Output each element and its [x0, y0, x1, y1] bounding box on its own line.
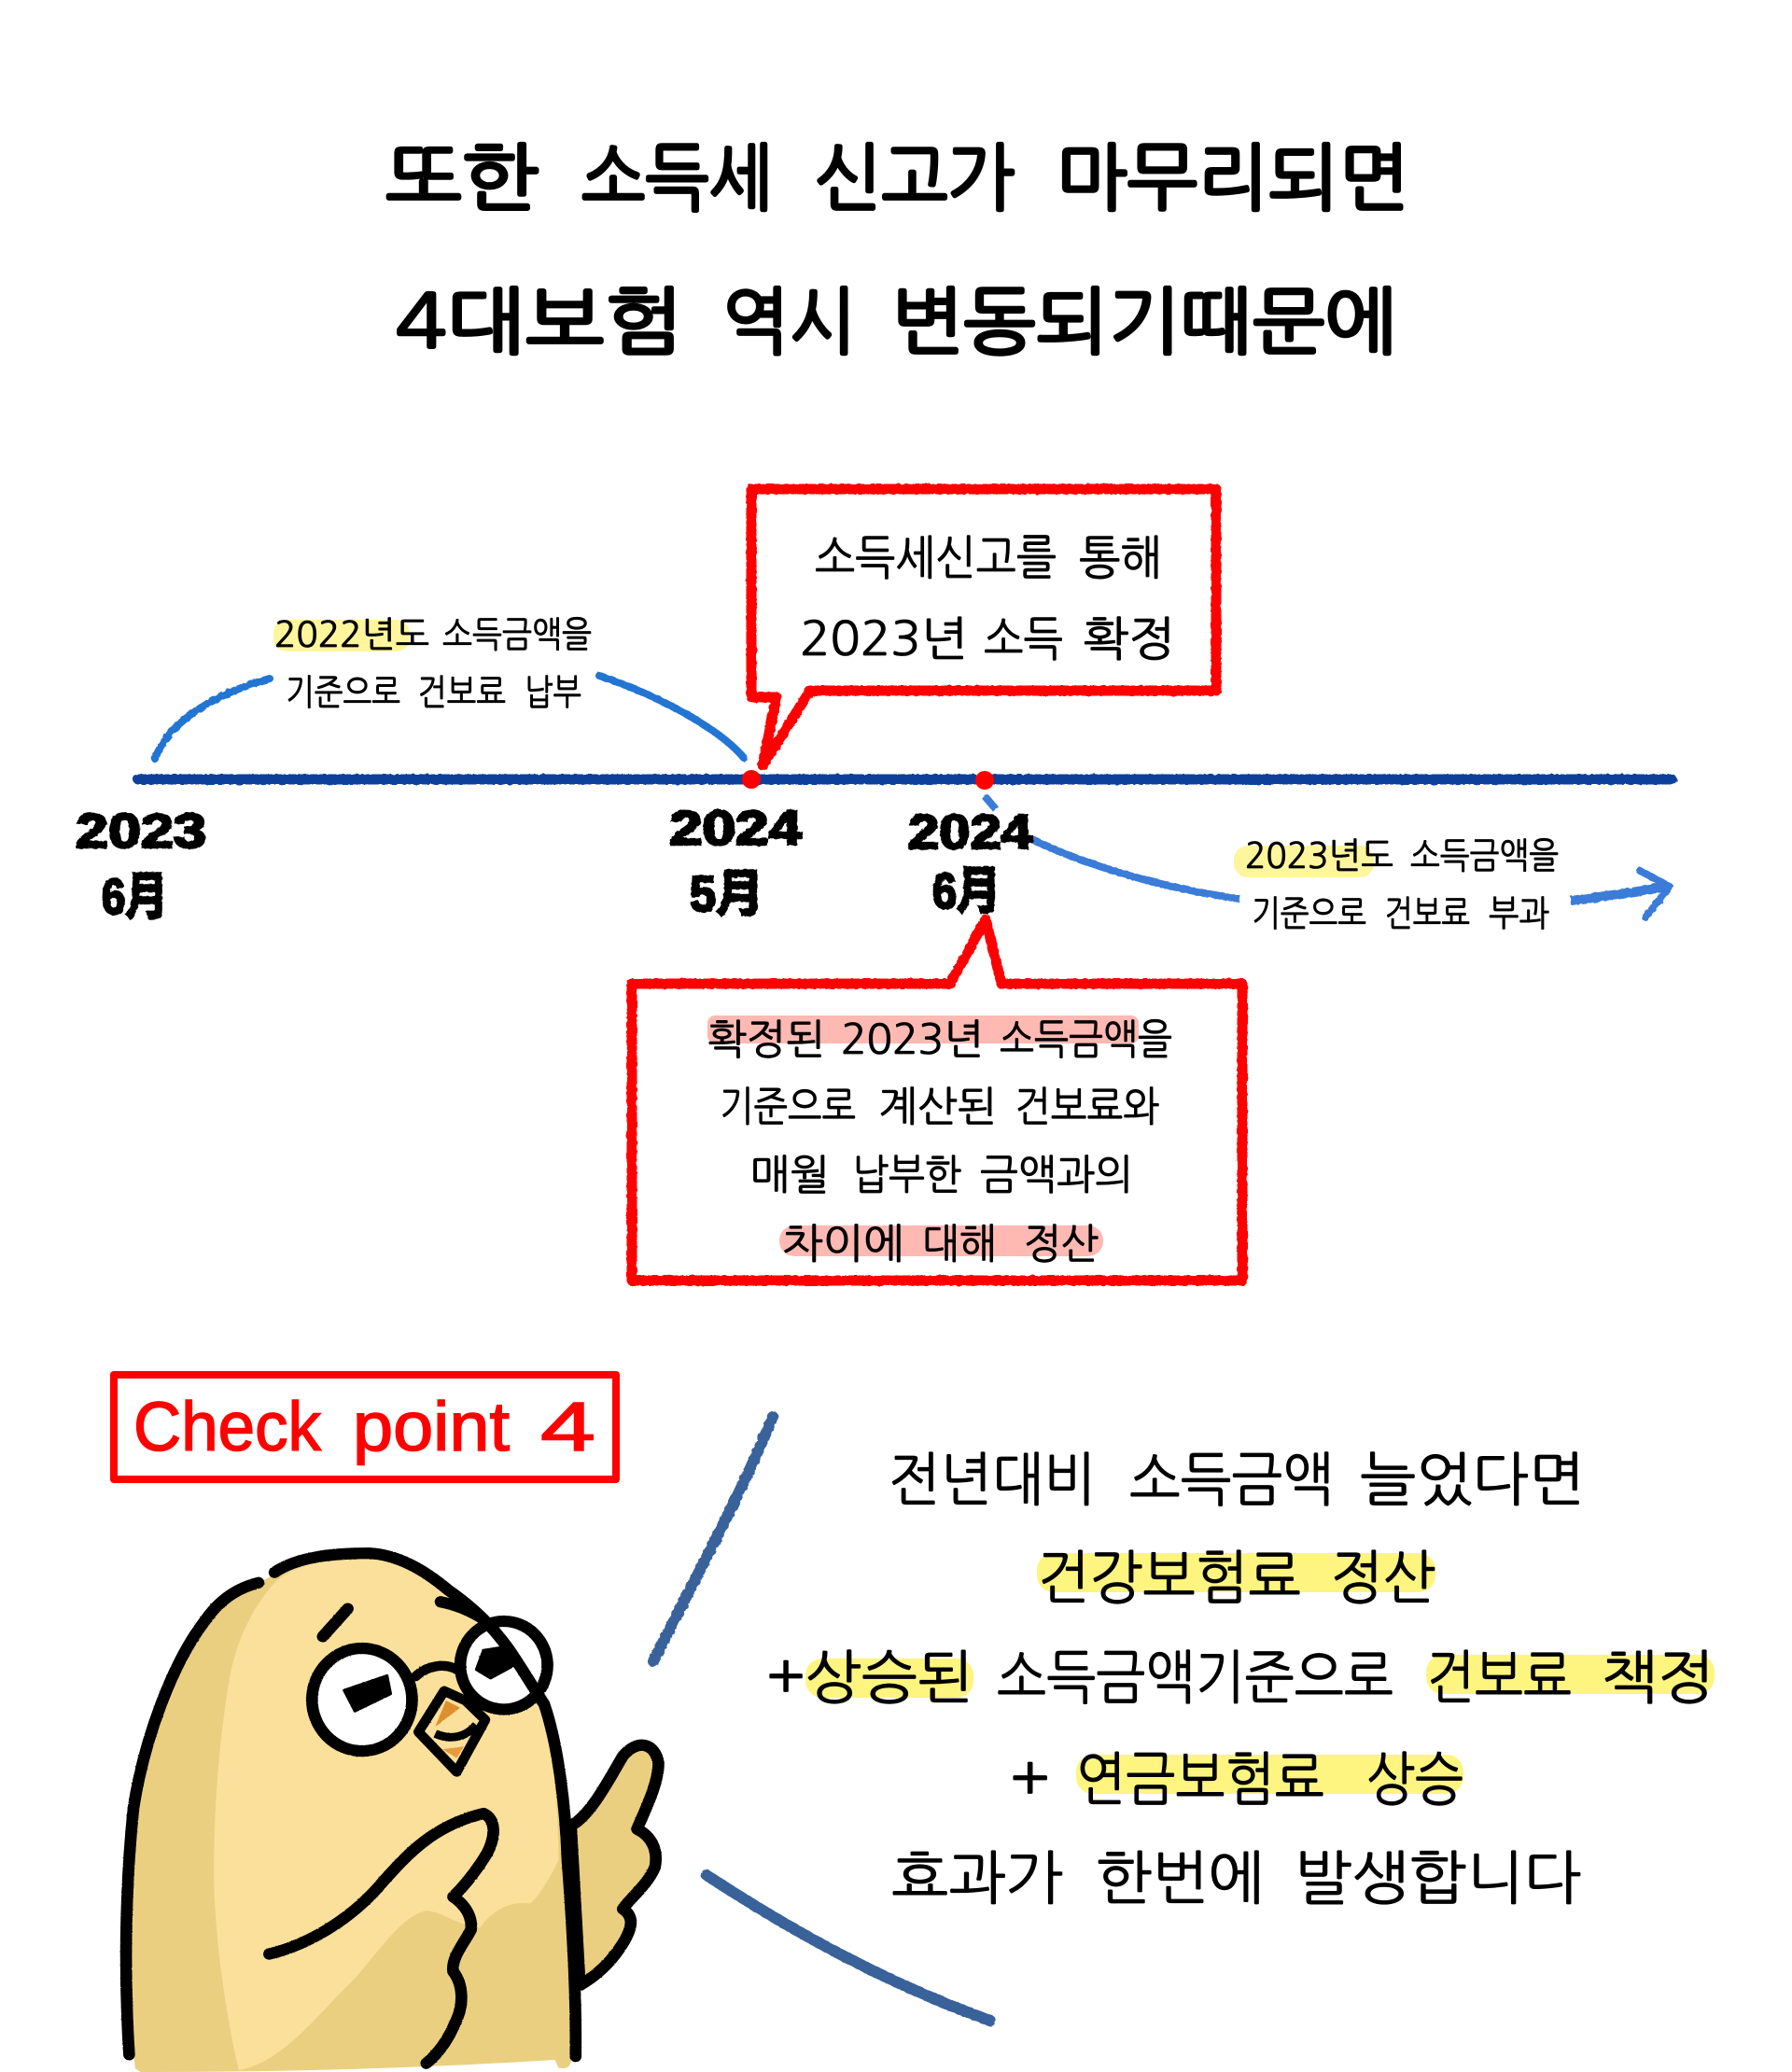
callout: settlement explanation: 금액과의 [980, 1155, 1133, 1196]
callout: income confirmed: 통해 [1079, 535, 1162, 581]
speech mark: lower stroke [707, 1875, 990, 2021]
date label: 2024 June [908, 805, 1032, 919]
explanation text: +상승된 [766, 1648, 973, 1706]
arc arrow: 2023 income basis period [985, 796, 1670, 917]
explanation text: 상승 [1366, 1750, 1463, 1808]
label: 2022 income basis: 건보료 [417, 675, 506, 710]
callout: settlement explanation [632, 919, 1242, 1281]
callout: settlement explanation: 대해 [922, 1224, 997, 1265]
explanation text [766, 1450, 1715, 1907]
badge: check point 4: Check [133, 1388, 322, 1465]
title: 또한 [385, 142, 539, 215]
duck outline [126, 1553, 576, 2056]
callout: settlement explanation: 2023년 [841, 1019, 984, 1060]
callout: settlement explanation: 건보료와 [1015, 1086, 1159, 1127]
explanation text: 소득금액 [1129, 1450, 1334, 1508]
badge: check point 4 [114, 1375, 616, 1479]
title: 신고가 [815, 142, 1015, 215]
marker: 2024 June [975, 771, 994, 790]
badge: check point 4: point [353, 1388, 510, 1465]
label: 2023 income basis: 기준으로 [1252, 896, 1366, 931]
callout: settlement explanation: 매월 [750, 1155, 830, 1196]
date label: 2023 June [76, 805, 206, 925]
badge: check point 4: 4 [540, 1388, 595, 1465]
date label: 2023 June: 6月 [102, 869, 168, 925]
callout: settlement explanation: 확정된 [707, 1019, 825, 1060]
callout: settlement explanation: 정산 [1024, 1224, 1099, 1265]
label: 2023 income basis: 2023년도 [1245, 838, 1393, 874]
duck arm and eyebrow lines [269, 1609, 494, 2064]
duck glasses [312, 1621, 548, 1751]
date label: 2023 June: 2023 [76, 805, 206, 859]
label: 2023 income basis [1234, 838, 1559, 931]
title: 4대보험 [396, 286, 683, 358]
duck body highlight [214, 1557, 558, 2070]
title: 역시 [722, 286, 856, 358]
callout: income confirmed [751, 489, 1216, 765]
title: 소득세 [581, 142, 773, 215]
date label: 2024 June: 2024 [908, 805, 1032, 860]
callout: settlement explanation: 차이에 [782, 1224, 904, 1265]
explanation text: + [1010, 1750, 1050, 1808]
label: 2022 income basis: 기준으로 [286, 675, 400, 710]
explanation text: 정산 [1331, 1548, 1435, 1606]
label: 2023 income basis: 부과 [1489, 896, 1549, 931]
duck wing [571, 1745, 659, 1985]
duck mascot [126, 1553, 659, 2072]
callout: income confirmed: 확정 [1083, 616, 1175, 663]
explanation text: 소득금액기준으로 [997, 1648, 1393, 1706]
duck beak [418, 1691, 485, 1771]
date label: 2024 May: 2024 [669, 802, 802, 856]
title [385, 142, 1409, 358]
title: 변동되기때문에 [891, 286, 1397, 358]
label: 2023 income basis: 건보료 [1384, 896, 1470, 931]
duck body [127, 1557, 573, 2072]
explanation text: 전년대비 [889, 1450, 1096, 1508]
explanation text: 발생합니다 [1295, 1849, 1581, 1907]
label: 2022 income basis: 납부 [525, 675, 581, 710]
marker: 2024 May [742, 770, 761, 789]
callout: income confirmed: 소득세신고를 [815, 535, 1057, 581]
callout: settlement explanation: 납부한 [852, 1155, 961, 1196]
date label: 2024 June: 6月 [932, 863, 1001, 919]
date label: 2024 May: 5月 [690, 866, 763, 922]
callout: income confirmed: 2023년 [800, 616, 968, 663]
explanation text: 한번에 [1096, 1849, 1265, 1907]
label: 2022 income basis [273, 617, 592, 710]
title: 마무리되면 [1057, 142, 1409, 215]
duck pupils [344, 1647, 519, 1711]
date label: 2024 May [669, 802, 802, 922]
explanation text: 연금보험료 [1076, 1750, 1324, 1808]
arc: 2022 income basis period [155, 676, 744, 759]
speech mark: upper stroke [653, 1417, 773, 1661]
label: 2022 income basis: 소득금액을 [442, 617, 592, 652]
callout: settlement explanation: 계산된 [878, 1086, 997, 1127]
explanation text: 효과가 [891, 1849, 1063, 1907]
explanation text: 늘었다면 [1360, 1450, 1585, 1508]
callout: income confirmed: 소득 [984, 616, 1063, 663]
callout: settlement explanation: 소득금액을 [1000, 1019, 1172, 1060]
timeline axis [138, 775, 1672, 784]
explanation text: 건보료 [1426, 1648, 1572, 1706]
label: 2023 income basis: 소득금액을 [1410, 838, 1559, 874]
explanation text: 책정 [1602, 1648, 1715, 1706]
callout: settlement explanation: 기준으로 [720, 1086, 856, 1127]
explanation text: 건강보험료 [1037, 1548, 1301, 1606]
label: 2022 income basis: 2022년도 [274, 617, 429, 652]
